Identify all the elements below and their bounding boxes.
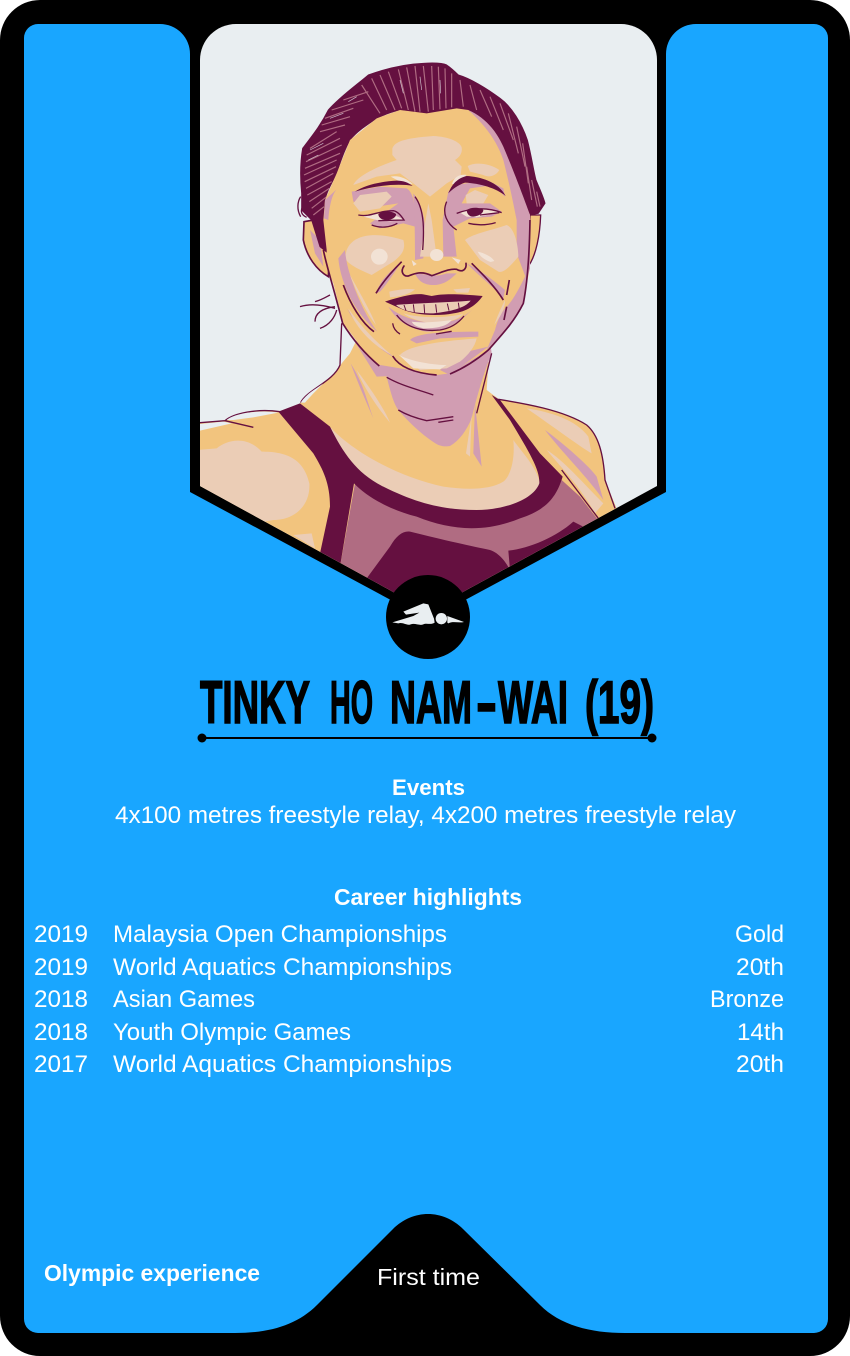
career highlights: [34, 884, 784, 1078]
portrait: loose strands: [300, 295, 337, 328]
portrait: ears: [303, 215, 541, 277]
title: HO: [330, 669, 373, 736]
icon: swimmer: [392, 603, 464, 625]
highlights table: 2019: [34, 954, 88, 981]
highlights table: [34, 921, 784, 1078]
olympic experience label: Olympic experience: [44, 1260, 260, 1286]
highlights table: 20th: [736, 1051, 784, 1078]
highlights table: 2019: [34, 921, 88, 948]
events: 4x100 metres freestyle relay, 4x200 metres freestyle relay: [115, 802, 736, 829]
title: (19): [585, 669, 654, 736]
portrait: chin: [389, 288, 478, 370]
title: -: [476, 669, 497, 736]
badge: swimming icon: [386, 575, 470, 659]
portrait: face: [323, 108, 530, 377]
highlights table: Bronze: [710, 986, 784, 1013]
portrait: nose: [402, 263, 466, 285]
highlights table: 2018: [34, 1019, 88, 1046]
highlights table: 14th: [737, 1019, 784, 1046]
portrait: eye shadows: [352, 180, 505, 260]
events: [115, 775, 736, 829]
portrait: jaw shading: [338, 250, 527, 377]
events: Events: [392, 775, 465, 800]
highlights table: Gold: [735, 921, 784, 948]
portrait: jaw line: [323, 220, 530, 375]
title: [198, 669, 656, 742]
highlights table: 20th: [736, 954, 784, 981]
highlights table: Malaysia Open Championships: [113, 921, 447, 948]
portrait: hair: [298, 63, 545, 253]
title: TINKY: [200, 669, 310, 736]
title: NAM: [390, 669, 472, 736]
highlights table: World Aquatics Championships: [113, 1051, 452, 1078]
highlights table: 2018: [34, 986, 88, 1013]
career highlights: Career highlights: [334, 884, 522, 910]
portrait: mouth: [385, 294, 483, 334]
highlights table: Youth Olympic Games: [113, 1019, 351, 1046]
highlights table: World Aquatics Championships: [113, 954, 452, 981]
portrait: eyes and brows: [355, 176, 506, 250]
portrait panel: [197, 24, 657, 614]
highlights table: 2017: [34, 1051, 88, 1078]
olympic experience value: First time: [377, 1264, 480, 1290]
portrait: cheeks: [345, 225, 518, 275]
title underline: [198, 734, 656, 742]
highlights table: Asian Games: [113, 986, 255, 1013]
portrait: shoulders and singlet: [197, 323, 620, 607]
title: WAI: [498, 669, 568, 736]
portrait: head: [298, 63, 545, 377]
